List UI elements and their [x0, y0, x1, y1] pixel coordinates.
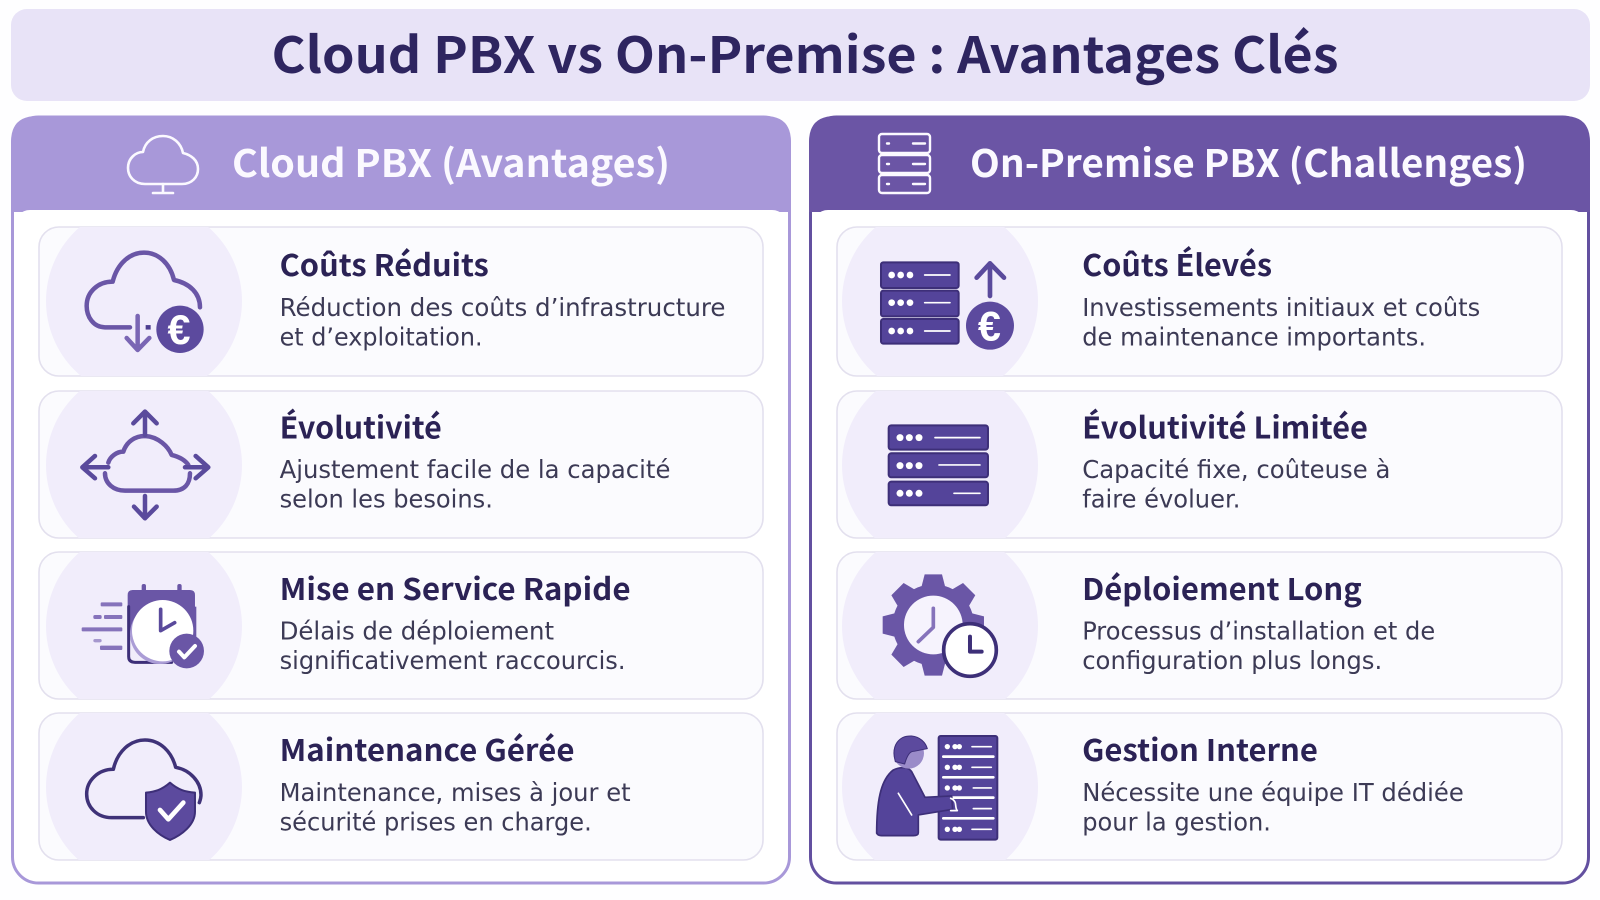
card: Coûts Élevés — [836, 226, 1563, 377]
card text: faire évoluer. — [1082, 484, 1240, 514]
card title: Évolutivité Limitée — [1082, 404, 1368, 448]
icon: cloud with euro and down arrow — [87, 253, 204, 353]
card title: Maintenance Gérée — [280, 726, 574, 770]
icon: calendar clock with speed lines and check — [82, 584, 204, 668]
icon: gear with clocks — [883, 574, 996, 676]
card text: et d’exploitation. — [280, 322, 483, 352]
icon: cloud with euro and down arrow: € — [167, 307, 190, 353]
card text: sécurité prises en charge. — [280, 808, 592, 836]
icon: cloud with four arrows — [82, 412, 208, 518]
card title: Gestion Interne — [1082, 726, 1318, 770]
card text: configuration plus longs. — [1082, 646, 1382, 675]
icon: cloud with shield — [87, 740, 201, 840]
title: Cloud PBX vs On-Premise : Avantages Clés — [272, 16, 1338, 88]
panel heading: Cloud PBX (Avantages): Cloud PBX (Avantages) — [232, 133, 670, 188]
card text: Capacité fixe, coûteuse à — [1082, 455, 1390, 484]
card: Gestion Interne — [836, 712, 1563, 861]
card text: de maintenance importants. — [1082, 322, 1426, 352]
card text: Processus d’installation et de — [1082, 616, 1435, 646]
card: Évolutivité — [38, 390, 764, 539]
icon: server outline — [879, 134, 930, 193]
card text: Nécessite une équipe IT dédiée — [1082, 778, 1464, 807]
card text: Délais de déploiement — [280, 616, 554, 646]
panel header: Cloud PBX — [11, 116, 791, 270]
icon: server stack — [889, 425, 988, 505]
card: Évolutivité Limitée — [836, 390, 1563, 539]
icon: server with up arrow and euro: € — [978, 303, 1001, 349]
title banner — [11, 9, 1590, 101]
card: Mise en Service Rapide — [38, 551, 764, 700]
card text: selon les besoins. — [280, 484, 493, 514]
card title: Évolutivité — [280, 404, 442, 448]
card: Maintenance Gérée — [38, 712, 764, 861]
panel: On-Premise PBX challenges — [809, 116, 1590, 885]
card text: pour la gestion. — [1082, 808, 1271, 836]
card title: Coûts Réduits — [280, 241, 489, 285]
card: Coûts Réduits — [38, 226, 764, 377]
card title: Mise en Service Rapide — [280, 565, 631, 609]
icon: technician at server rack — [877, 736, 997, 840]
card text: Réduction des coûts d’infrastructure — [280, 293, 726, 322]
card text: significativement raccourcis. — [280, 646, 626, 675]
card: Déploiement Long — [836, 551, 1563, 700]
card text: Investissements initiaux et coûts — [1082, 293, 1480, 322]
panel heading: On-Premise PBX (Challenges): On-Premise PBX (Challenges) — [970, 133, 1527, 188]
icon: server with up arrow and euro — [881, 262, 1014, 350]
icon: cloud outline — [128, 136, 198, 193]
card title: Déploiement Long — [1082, 565, 1362, 609]
card text: Maintenance, mises à jour et — [280, 778, 631, 807]
card title: Coûts Élevés — [1082, 241, 1272, 285]
panel header: On-Premise PBX — [809, 116, 1590, 270]
panel: Cloud PBX advantages — [11, 116, 791, 885]
card text: Ajustement facile de la capacité — [280, 455, 670, 484]
